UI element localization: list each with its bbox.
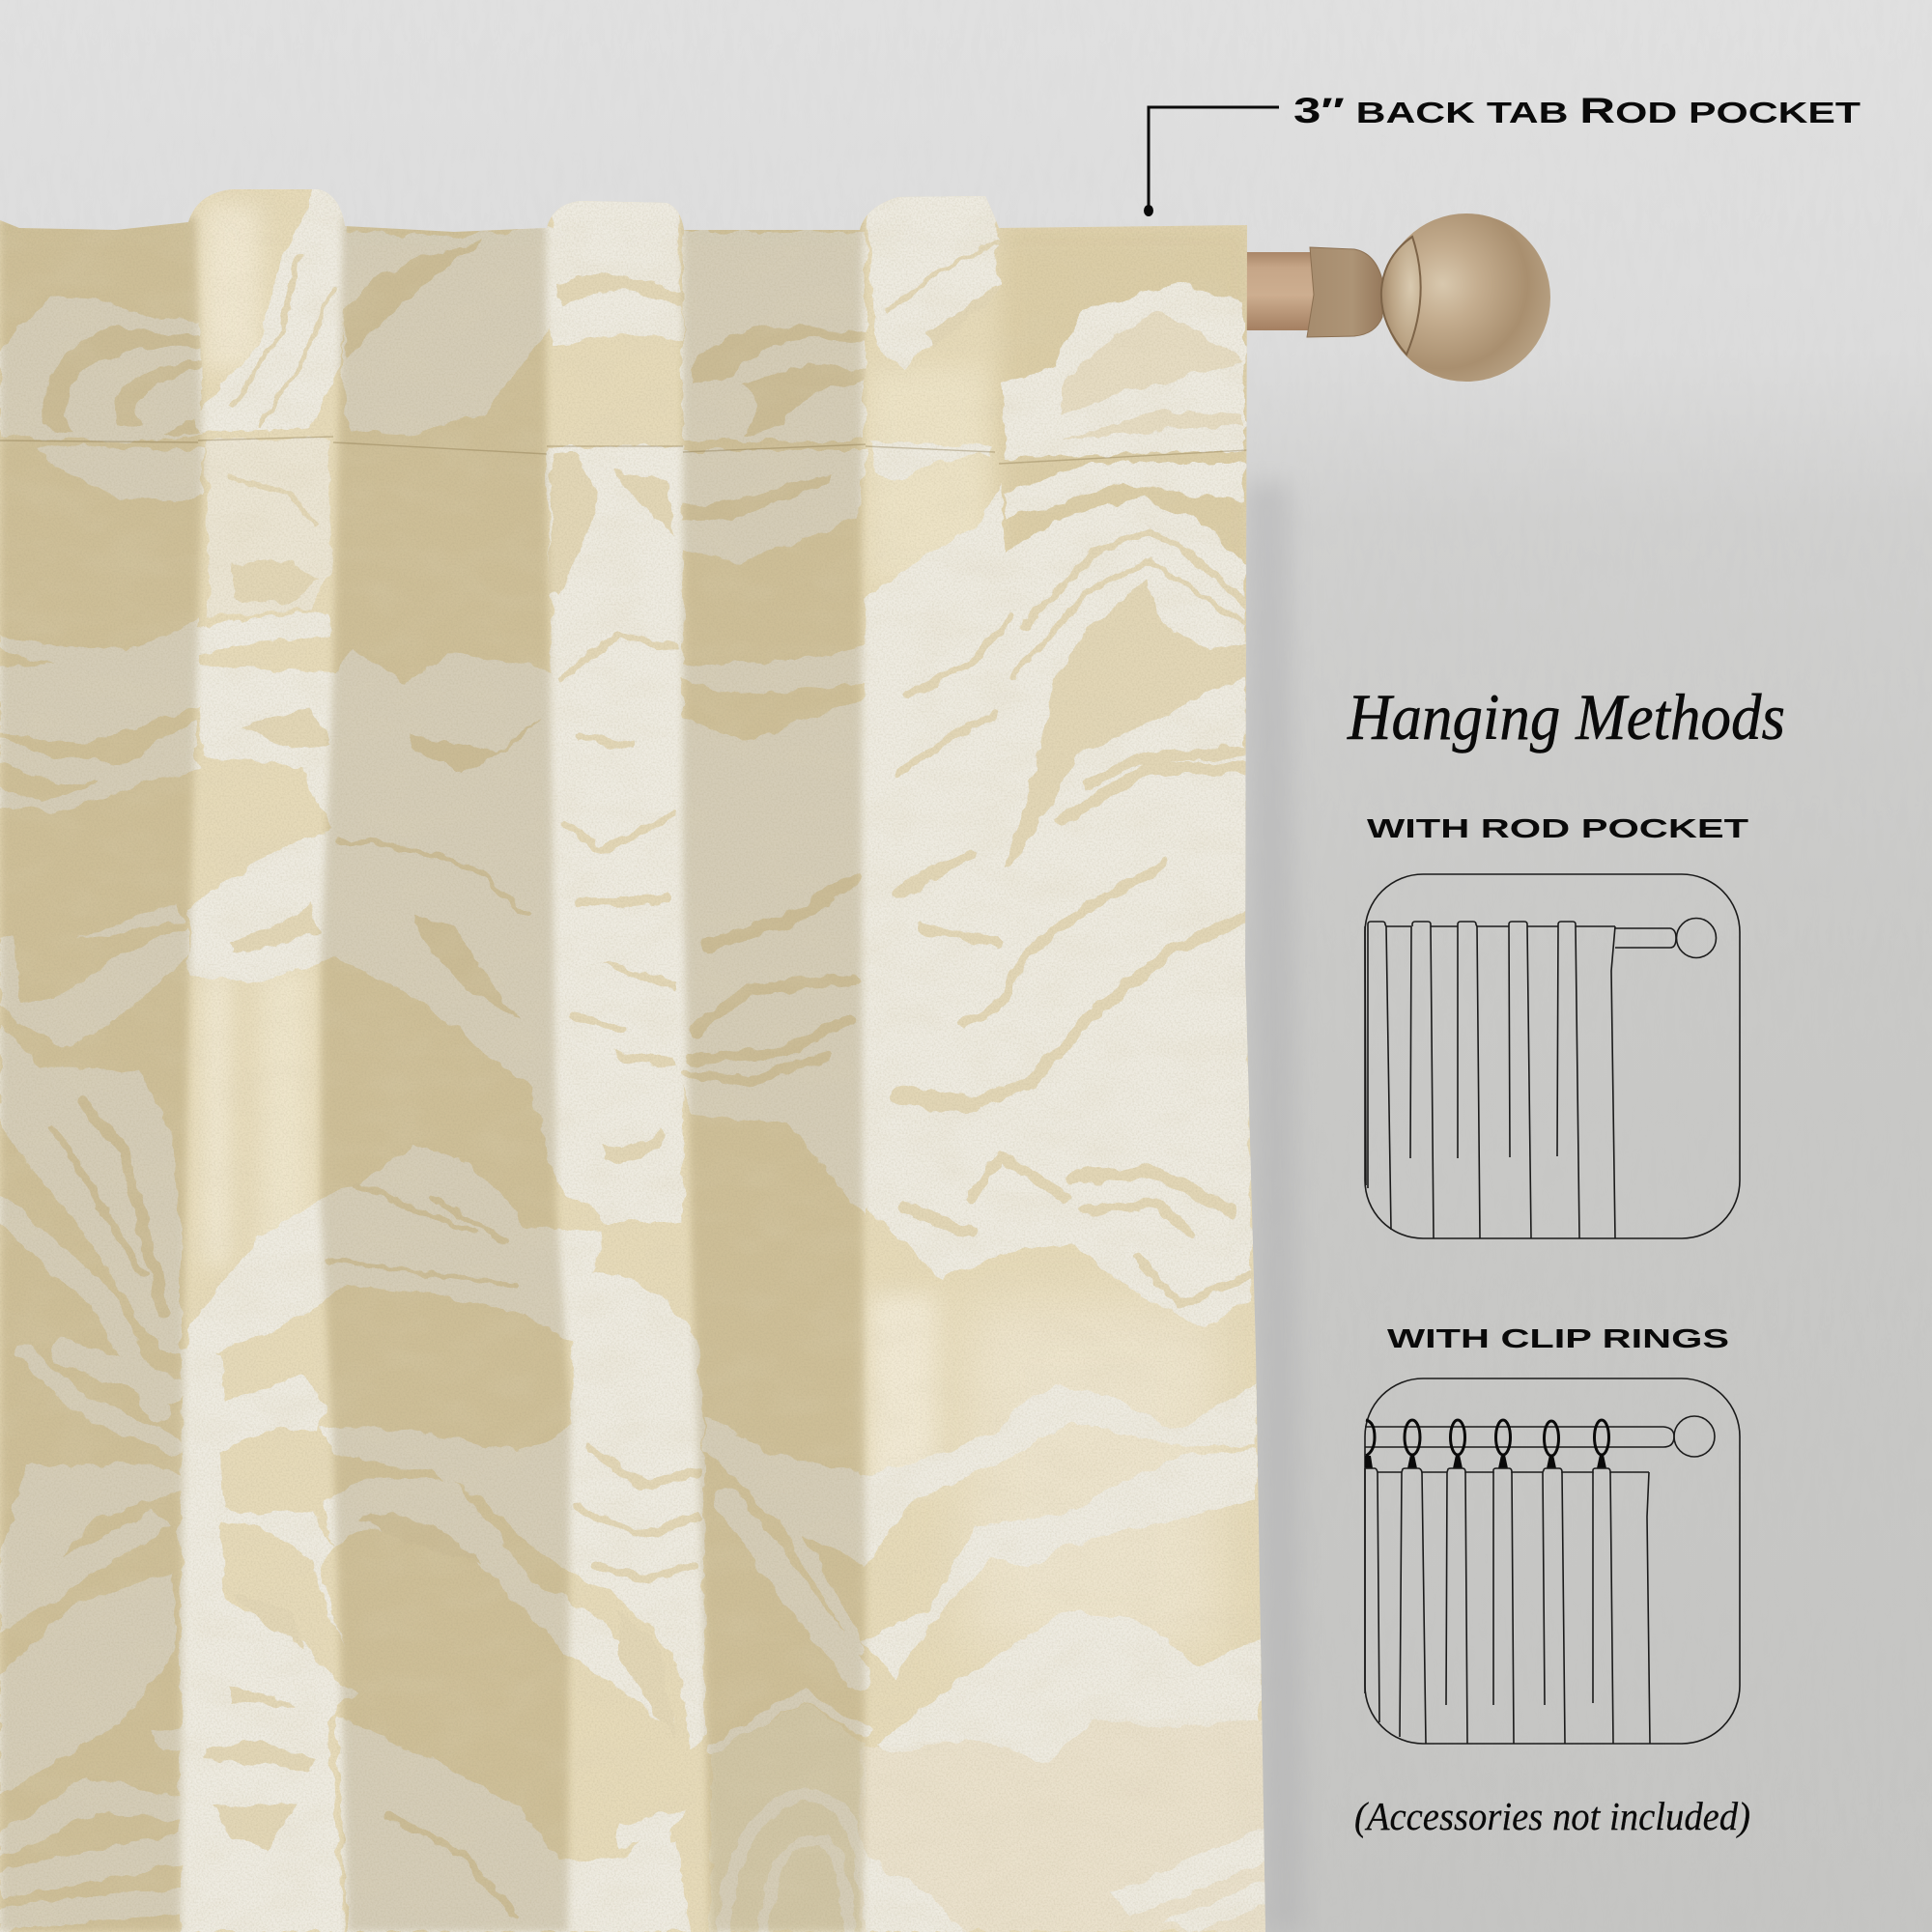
panel: curtain bbox=[0, 184, 1275, 1932]
bands: right fold bbox=[860, 184, 1270, 1932]
callout label: 3″ BACK TAB R OD POCKET bbox=[1293, 91, 1861, 130]
curtain shadow on wall bbox=[1245, 483, 1304, 1932]
fabric mottling bbox=[0, 184, 1275, 1932]
rod collar bbox=[1307, 247, 1382, 337]
note: accessories not included: (Accessories not included) bbox=[1354, 1794, 1750, 1838]
bands: second recess bbox=[185, 227, 681, 1932]
leader dot bbox=[1144, 205, 1153, 216]
bands: left fan bbox=[0, 901, 189, 1932]
curtain rod bbox=[1244, 213, 1550, 382]
subheading: with clip rings: WITH CLIP RINGS bbox=[1387, 1323, 1729, 1353]
leader line bbox=[1149, 107, 1279, 209]
heading: hanging methods: Hanging Methods bbox=[1347, 680, 1785, 753]
rod shaft bbox=[1244, 252, 1314, 330]
bands: first fold bbox=[181, 184, 357, 1932]
top right panel tint bbox=[999, 225, 1247, 742]
fabric grain bbox=[0, 184, 1275, 1932]
finial ball bbox=[1382, 213, 1550, 382]
icon: rod pocket curtain diagram bbox=[1365, 874, 1740, 1238]
right fold pale satin bbox=[966, 1304, 1217, 1652]
subheading: with rod pocket: WITH ROD POCKET bbox=[1367, 813, 1748, 843]
bands: central sweep and second fold bbox=[189, 184, 704, 1932]
recess shadows bbox=[0, 217, 866, 1932]
icon: clip rings curtain diagram bbox=[1365, 1378, 1740, 1744]
finial flange bbox=[1381, 237, 1421, 355]
satin fold highlights bbox=[203, 203, 985, 1488]
marble pattern bands bbox=[0, 184, 1270, 1932]
bands: left recess top bbox=[0, 297, 203, 812]
callout: rod pocket line bbox=[1144, 107, 1279, 216]
bands: third recess bbox=[676, 232, 866, 1932]
fabric base bbox=[0, 184, 1275, 1932]
header seam bbox=[0, 437, 1247, 464]
